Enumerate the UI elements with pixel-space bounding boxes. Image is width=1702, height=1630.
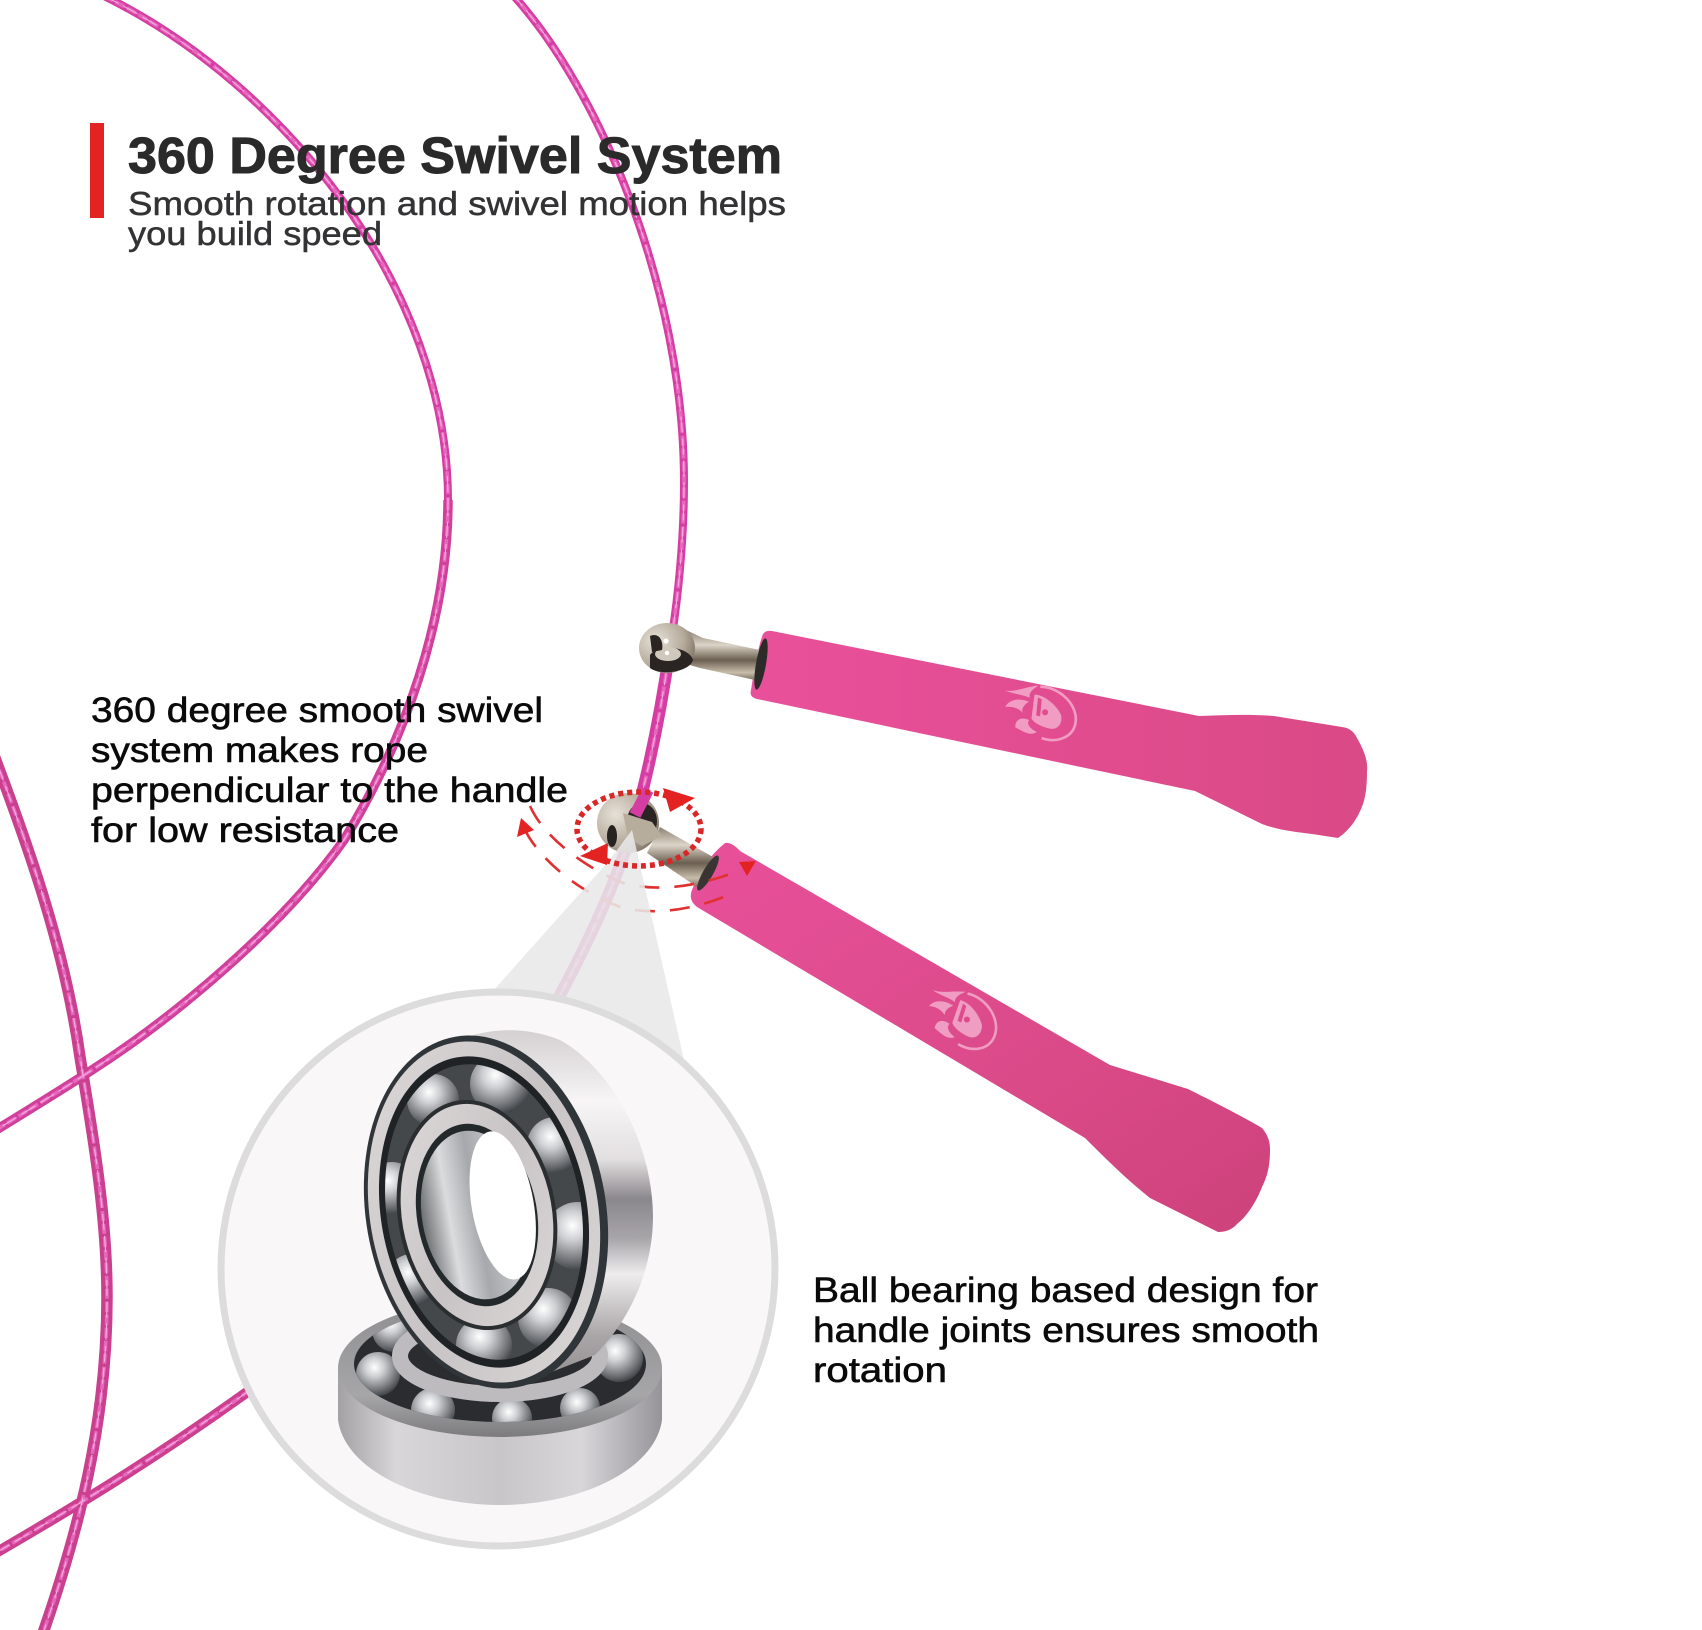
logo on upper handle	[997, 679, 1082, 745]
bearing close-up circle	[221, 992, 775, 1546]
red arrowheads	[517, 788, 756, 876]
title: 360 Degree Swivel System	[128, 127, 782, 184]
upper swivel joint	[639, 623, 770, 690]
lower swivel joint	[597, 790, 722, 893]
subtitle: Smooth rotation and swivel motion helps	[128, 185, 786, 222]
lower handle	[691, 843, 1270, 1232]
motion arcs, dashed	[525, 806, 733, 911]
subtitle: you build speed	[128, 215, 382, 252]
callout: ball bearing: rotation	[813, 1351, 947, 1390]
jump rope cables	[0, 0, 684, 1630]
upper handle	[751, 631, 1367, 838]
logo on lower handle	[916, 979, 1006, 1057]
callout: swivel system	[91, 691, 568, 850]
callout: swivel system: perpendicular to the handle	[91, 771, 568, 810]
callout: swivel system: 360 degree smooth swivel	[91, 691, 543, 730]
lower ball bearing	[338, 1299, 662, 1505]
callout: ball bearing: Ball bearing based design for	[813, 1271, 1318, 1310]
zoom cone to bearing close-up	[492, 830, 684, 1060]
rotation ring, dotted	[577, 792, 701, 866]
callout: swivel system: for low resistance	[91, 811, 399, 850]
red accent bar	[90, 123, 104, 218]
upper ball bearing	[364, 1030, 653, 1389]
callout: ball bearing: handle joints ensures smooth	[813, 1311, 1319, 1350]
callout: swivel system: system makes rope	[91, 731, 428, 770]
subtitle	[128, 185, 786, 252]
callout: ball bearing	[813, 1271, 1319, 1390]
